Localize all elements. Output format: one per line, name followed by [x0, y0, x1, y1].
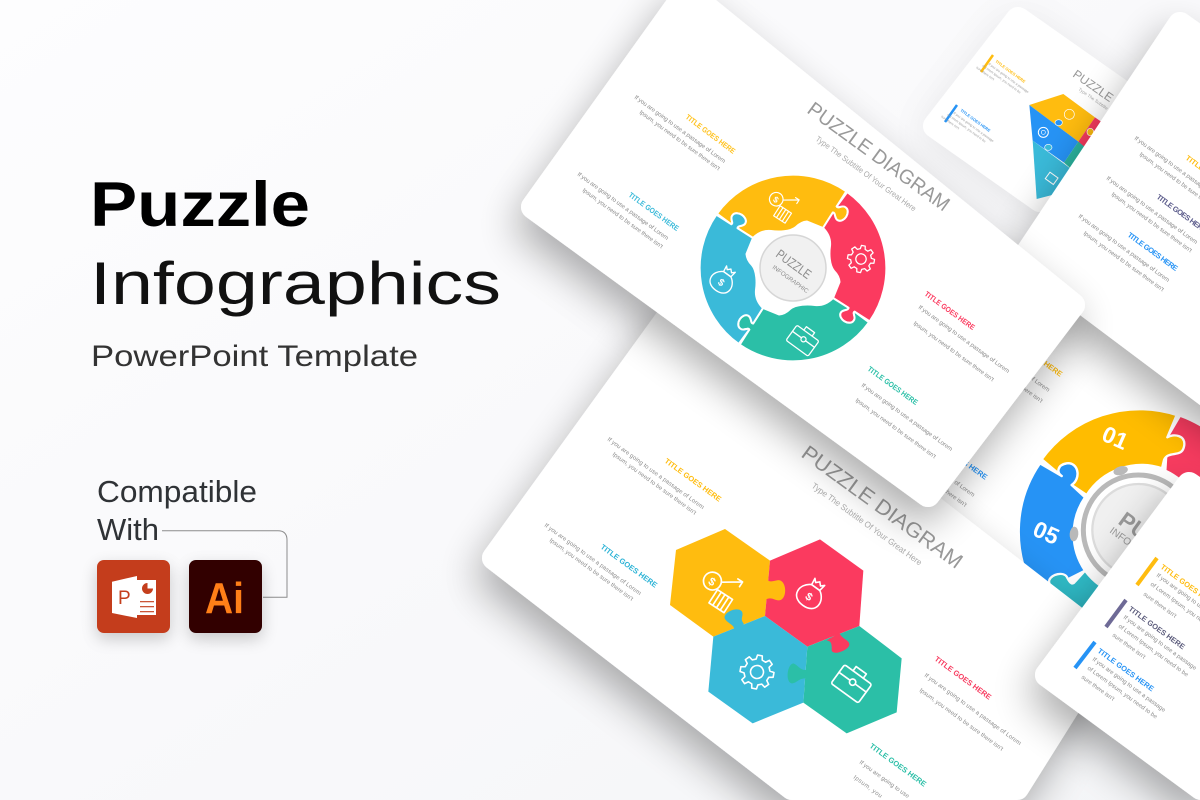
- icon: coin chart: $: [706, 576, 718, 589]
- heading: Puzzle: Puzzle: [90, 170, 310, 240]
- compatible with label: Compatible: [97, 474, 257, 509]
- subtitle: Type The Subtitle Of Your Great Here: [1077, 87, 1142, 134]
- ring label: PUZZLE: [1114, 507, 1198, 577]
- text block purple: Ipsum, you need to be sure there isn't: [1110, 192, 1193, 254]
- text block red: If you are going to use a passage of Lorem: [923, 673, 1022, 747]
- centre circle: [760, 235, 826, 301]
- text block blue: TITLE GOES HERE: [1126, 230, 1180, 273]
- text block yellow: sure there isn't: [1142, 592, 1177, 620]
- piece: red: [823, 192, 886, 323]
- piece: blue hexagon: [708, 616, 807, 723]
- text block yellow: sure there isn't: [975, 65, 995, 81]
- text block purple: sure there isn't: [1111, 633, 1146, 661]
- piece: blue: [700, 213, 763, 344]
- connector line: [162, 531, 287, 597]
- tab: blue: [725, 609, 744, 633]
- text block blue: Ipsum, you need to be sure there isn't: [581, 188, 664, 250]
- text block blue: of Lorem Ipsum, you need to be: [946, 113, 987, 143]
- piece: teal: [738, 298, 869, 361]
- text block yellow: If you are going to use a passage of Lorem: [606, 437, 705, 511]
- text block yellow: TITLE GOES HERE: [684, 112, 737, 156]
- text block blue: TITLE GOES HERE: [599, 542, 659, 590]
- partial body yellow: If you are going to use a passage of Lorem: [955, 322, 1050, 394]
- pyramid diagram: [1029, 94, 1108, 199]
- text block yellow: TITLE GOES HERE: [663, 456, 723, 504]
- compatible with label: [97, 474, 257, 547]
- text block purple: of Lorem Ipsum, you need to be: [1117, 624, 1189, 679]
- icon: gear: [738, 653, 776, 691]
- text block teal: TITLE GOES HERE: [866, 364, 920, 407]
- text block blue: [1080, 646, 1167, 721]
- text block purple: If you are going to use a passage: [1122, 615, 1198, 672]
- partial text blue: TITLE GOES HERE: [929, 435, 989, 482]
- tab: yellow: [764, 578, 785, 601]
- slide: text list lower right: [1047, 484, 1200, 788]
- text block teal: Ipsum, you: [852, 775, 883, 800]
- text block purple: TITLE GOES HERE: [1127, 604, 1187, 651]
- centre label: [771, 246, 815, 295]
- text block blue: sure there isn't: [940, 114, 960, 130]
- ring label: INFOGRAPHIC: [1107, 526, 1170, 575]
- text block teal: [852, 741, 928, 800]
- icon: money bag: [706, 262, 740, 297]
- puzzle ring diagram: [700, 175, 886, 361]
- centre label: PUZZLE: [773, 246, 815, 282]
- centre label: INFOGRAPHIC: [771, 265, 810, 295]
- text block teal: TITLE GOES HERE: [868, 741, 928, 789]
- icon: coin chart: $: [771, 194, 781, 205]
- text block yellow: [1142, 562, 1200, 637]
- partial body blue: If you are going to use a passage of Lorem: [880, 427, 975, 499]
- subheading: PowerPoint Template: [91, 340, 418, 373]
- accent bar yellow: [981, 55, 993, 72]
- icon: money bag: $: [715, 277, 727, 289]
- slide: pyramid puzzle: [935, 19, 1165, 200]
- piece: red hexagon: [765, 539, 863, 647]
- text block yellow: TITLE GOES HERE: [994, 59, 1027, 84]
- icon: Illustrator: Ai: [205, 574, 244, 623]
- icon: money bag: [792, 574, 830, 613]
- title: PUZZLE DIAGRAM: [797, 441, 967, 573]
- accent bar blue: [1075, 642, 1095, 668]
- icon: PowerPoint: [97, 560, 170, 633]
- icon: money bag: $: [803, 591, 815, 604]
- text block blue: Ipsum, you need to be sure there isn't: [548, 538, 634, 603]
- text block red: TITLE GOES HERE: [933, 654, 993, 702]
- piece: teal hexagon: [803, 626, 902, 733]
- tab: red: [827, 633, 849, 653]
- text block yellow: [975, 52, 1034, 102]
- text block yellow: If you are going to use a passage of Lorem: [633, 95, 726, 165]
- icon: gear: [845, 243, 877, 275]
- text block yellow: Ipsum, you need to be sure there isn't: [638, 110, 721, 172]
- text block teal: [854, 364, 953, 460]
- partial body blue: Ipsum, you need to be sure there isn't: [883, 445, 968, 509]
- text block blue: of Lorem Ipsum, you need to be: [1086, 666, 1158, 721]
- text block blue: If you are going to use a passage of Lorem: [543, 523, 642, 597]
- partial text yellow: TITLE GOES HERE: [1004, 332, 1064, 379]
- text block purple: If you are going to use a passage of Lorem: [1105, 176, 1198, 246]
- text block yellow: If you are going to use a passage: [988, 62, 1030, 94]
- text block teal: Ipsum, you need to be sure there isn't: [854, 398, 937, 460]
- text block red: Ipsum, you need to be sure there isn't: [918, 688, 1004, 753]
- text block purple: [1111, 604, 1198, 679]
- accent bar purple: [1106, 600, 1126, 627]
- text block blue: sure there isn't: [1080, 675, 1115, 703]
- slide: hexagon puzzle: [494, 308, 1108, 800]
- text block blue: If you are going to use a passage of Lorem: [1077, 214, 1170, 284]
- tab: teal: [788, 663, 807, 683]
- text block blue: TITLE GOES HERE: [1096, 646, 1156, 693]
- text block blue: If you are going to use a passage: [1091, 657, 1167, 714]
- title: PUZZLE DIAGRAM: [803, 98, 954, 216]
- text block red: Ipsum, you need to be sure there isn't: [912, 321, 995, 383]
- number 01: 01: [1098, 421, 1132, 455]
- icon: coin chart: [694, 563, 744, 613]
- icon: coin chart: [762, 186, 800, 223]
- slide: text list upper right: [1024, 24, 1200, 420]
- text block blue: TITLE GOES HERE: [627, 190, 681, 233]
- heading: Infographics: Infographics: [90, 250, 501, 317]
- text block blue: If you are going to use a passage of Lorem: [576, 172, 669, 242]
- accent bar blue: [945, 105, 957, 122]
- subtitle: Type The Subtitle Of Your Great Here: [810, 481, 924, 568]
- slide: circle puzzle numbered: [880, 270, 1200, 650]
- text block yellow: of Lorem Ipsum, you need to be: [981, 64, 1022, 94]
- text block yellow: Ipsum, you need to be sure there isn't: [611, 452, 697, 517]
- text block teal: If you are going to use: [858, 760, 910, 800]
- text block teal: If you are going to use a passage of Lorem: [860, 383, 953, 453]
- piece: yellow: [717, 175, 848, 238]
- partial body yellow: Ipsum, you need to be sure there isn't: [959, 341, 1044, 405]
- icon: Illustrator: [189, 560, 262, 633]
- number 05: 05: [1029, 516, 1063, 550]
- icon: PowerPoint: P: [118, 588, 131, 609]
- numbered ring puzzle: [1019, 409, 1200, 650]
- accent bar yellow: [1137, 558, 1157, 585]
- hexagon puzzle diagram: [670, 529, 902, 733]
- text block red: If you are going to use a passage of Lorem: [917, 305, 1010, 375]
- text block blue: Ipsum, you need to be sure there isn't: [1082, 231, 1165, 293]
- text block blue: If you are going to use a passage: [953, 111, 995, 143]
- slide: circle puzzle main: [533, 0, 1073, 495]
- icon: briefcase: [786, 322, 821, 356]
- subtitle: Type The Subtitle Of Your Great Here: [814, 134, 918, 214]
- piece: yellow hexagon: [670, 529, 770, 637]
- text block red: TITLE GOES HERE: [923, 289, 977, 332]
- text block blue: TITLE GOES HERE: [959, 108, 992, 133]
- compatible with label: With: [97, 512, 159, 547]
- icon: briefcase: [831, 660, 875, 703]
- text block blue: [940, 101, 999, 151]
- title: PUZZLE DIAGRAM: [1070, 67, 1165, 139]
